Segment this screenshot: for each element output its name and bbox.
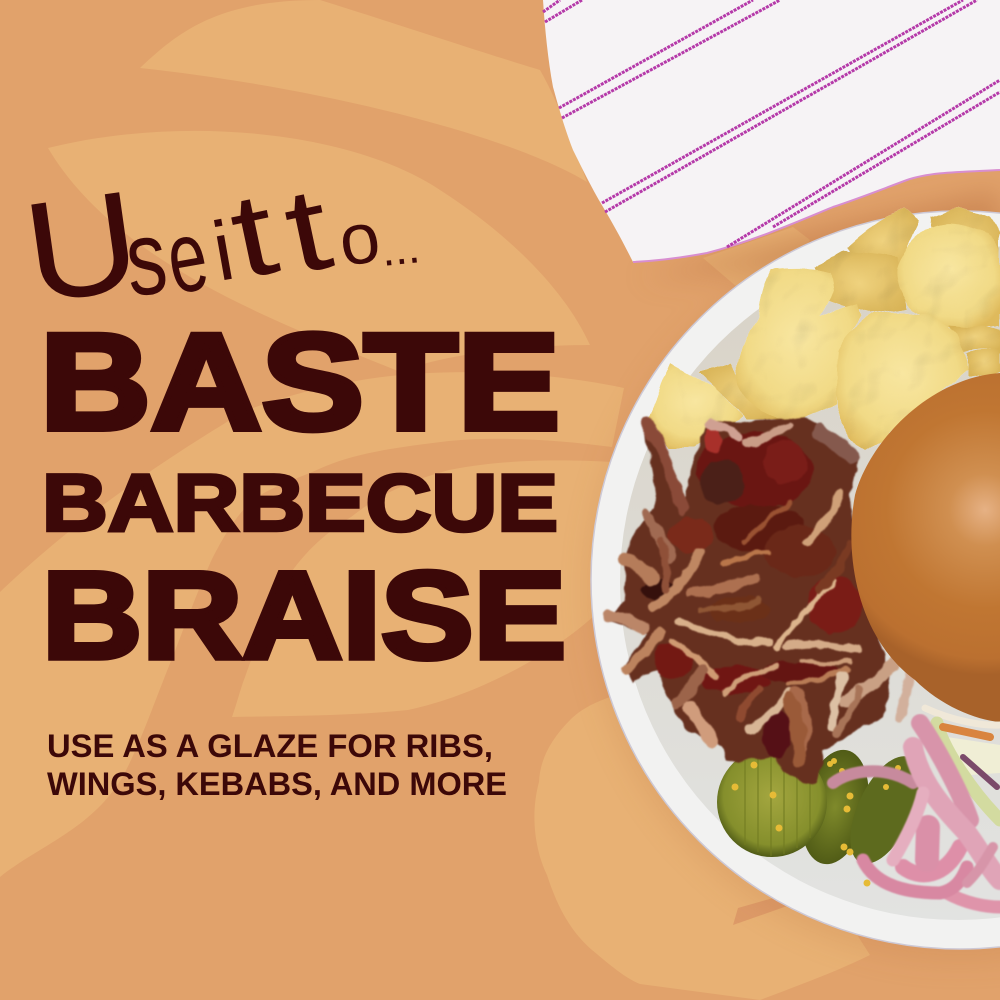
script heading: Use it to...: e	[158, 199, 216, 316]
potato chips	[647, 208, 1000, 450]
headline: barbecue: BARBECUE	[42, 458, 558, 548]
barbecue sauce	[642, 426, 863, 759]
script heading: Use it to...: t	[220, 167, 287, 304]
towel	[543, 0, 1000, 262]
script heading: Use it to...: U	[15, 160, 149, 333]
towel and plate shadow	[588, 190, 1000, 962]
pickled onions	[833, 723, 1000, 907]
hamburger bun	[851, 373, 1000, 722]
coleslaw	[925, 708, 1000, 820]
plate	[591, 211, 1000, 949]
script heading: Use it to...	[15, 160, 422, 333]
headline: baste: BASTE	[40, 306, 560, 459]
subheading	[47, 728, 507, 802]
script heading: Use it to...: s	[120, 198, 172, 318]
subheading: WINGS, KEBABS, AND MORE	[47, 766, 507, 802]
script heading: Use it to...: o	[334, 197, 385, 282]
pork strands	[610, 423, 910, 760]
pickles	[717, 744, 934, 886]
script heading: Use it to...: ...	[379, 220, 422, 276]
headline: braise: BRAISE	[42, 547, 566, 685]
script heading: Use it to...: i	[206, 203, 241, 299]
script heading: Use it to...: t	[274, 162, 341, 299]
subheading: USE AS A GLAZE FOR RIBS,	[47, 728, 493, 764]
pulled pork	[607, 417, 910, 783]
darker patch on bottom leaf	[733, 896, 790, 925]
